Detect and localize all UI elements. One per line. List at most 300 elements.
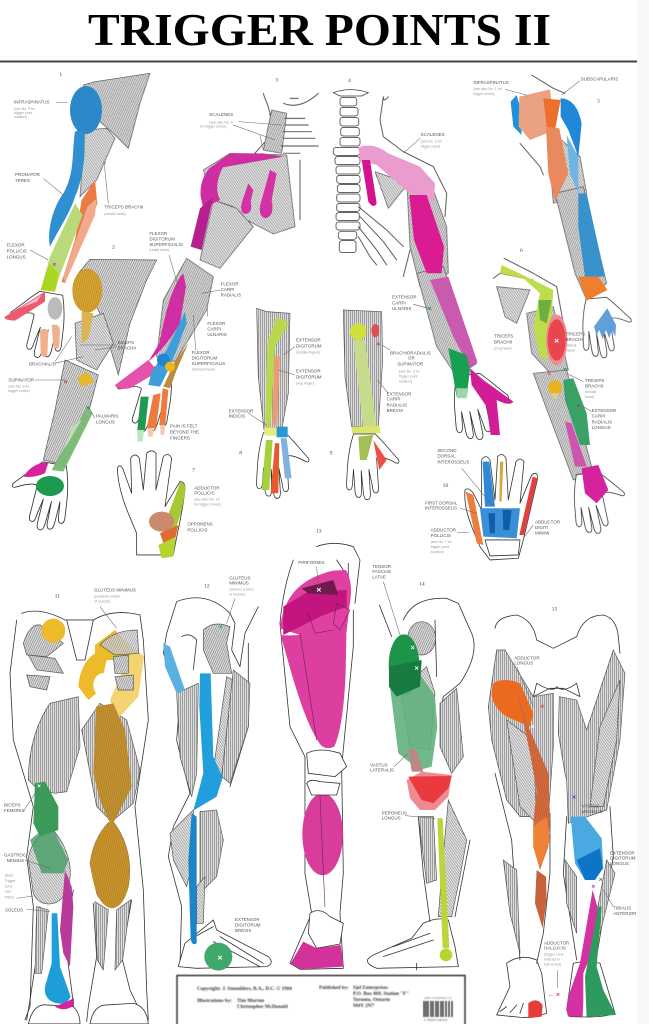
labels: LONGUS (514, 661, 533, 666)
labels: BREVIS (235, 928, 251, 933)
shoulder muscle fan (78, 259, 157, 375)
labels: 3 (275, 78, 278, 84)
green zone: wrist (158, 537, 176, 558)
labels: BRACHII (566, 337, 584, 342)
pink zone: thumb (5, 292, 45, 321)
figure 15: anterior legs (488, 606, 637, 1018)
trigger mark: supinator: × (64, 379, 68, 386)
blue zone: soleus (45, 913, 71, 1004)
figure 15: anterior legs: × (572, 792, 576, 801)
labels: SUPERFICIALIS (149, 242, 183, 247)
labels: (long head) (494, 346, 512, 350)
labels (494, 248, 617, 430)
trigger marks: × (531, 722, 535, 731)
salmon zone: shoulder (519, 89, 555, 140)
calf muscle, rear (170, 810, 193, 887)
blue zone: lower leg (188, 813, 197, 944)
right crossing muscle (590, 680, 620, 807)
trigger marks: × (415, 664, 419, 673)
labels (330, 345, 431, 457)
left thigh base (488, 650, 553, 817)
yellow-green strip (353, 340, 377, 427)
trigger mark: × (376, 341, 380, 348)
labels: TRICEPS (494, 334, 513, 339)
labels: SOLEUS (5, 907, 23, 912)
magenta zone: thumb base (23, 463, 48, 477)
figure 10: dorsal hand (425, 448, 561, 560)
magenta zone: hand (470, 368, 513, 435)
upper arm (407, 190, 448, 287)
labels: trigger point (14, 111, 32, 115)
labels: RADIALIS (592, 419, 612, 424)
labels: FEMORIS (4, 808, 24, 813)
blue hatching (578, 193, 605, 277)
forearm (343, 310, 383, 427)
labels: CARPI (387, 397, 400, 402)
deep hip muscles left (27, 655, 63, 690)
spine (333, 90, 368, 253)
icon: hand (109, 360, 178, 437)
wrist band (264, 428, 278, 436)
blue zone: hand (594, 308, 616, 339)
upper arm (75, 313, 113, 370)
calf muscle, front (418, 817, 437, 883)
barcode: ISBN 0-9790487-1-9 (424, 996, 452, 1000)
magenta zone: foot (291, 942, 344, 969)
green zone: lower leg and foot (585, 907, 616, 1017)
magenta zone: thigh (281, 620, 347, 748)
thigh muscles, rear (440, 688, 463, 773)
yellow zone: left gluteal (41, 619, 65, 643)
labels: head) (585, 395, 594, 399)
labels: RADIALIS (221, 293, 241, 298)
gluteal muscle (203, 624, 232, 673)
labels: (radial head) (149, 248, 169, 252)
labels: TRICEPS (566, 331, 585, 336)
figure 8: forearm extensors (229, 308, 322, 498)
labels: POLLICIS (194, 491, 215, 496)
labels: (see No. 9 for (8, 384, 30, 388)
trigger mark: extensor: × (576, 403, 580, 410)
labels: SCALENES (209, 112, 233, 117)
icon: hand (579, 295, 634, 359)
labels (7, 72, 143, 260)
labels: Trigger (5, 879, 16, 883)
labels: OPPONENS (187, 522, 213, 527)
labels: location) (431, 550, 444, 554)
labels: TERES (15, 178, 30, 183)
figure 7: hand with adductor pollicis (117, 451, 221, 558)
labels: SUPERFICIALIS (192, 361, 225, 366)
white bone patch (93, 673, 113, 697)
label: 13 (316, 529, 322, 535)
labels: INFRASPINATUS (14, 99, 50, 104)
labels: 14 (419, 582, 425, 588)
labels: for trigger zones) (194, 503, 221, 507)
blue zone: infraspinatus (70, 86, 102, 134)
scapula (497, 287, 530, 323)
labels: DIGITORUM (192, 355, 217, 360)
figure 13: whole leg, magenta zones: × (316, 585, 321, 595)
labels: 1 (59, 72, 62, 78)
credits box: P.O. Box 869, Station "F" (353, 991, 409, 997)
right thigh muscles (82, 703, 140, 822)
labels: POLLICIS (7, 249, 27, 254)
credits box (177, 976, 465, 1024)
credits box: Christopher McDonald (237, 1004, 288, 1010)
labels: ADDUCTOR (514, 656, 540, 661)
label: PIRIFORMIS (298, 560, 324, 565)
labels: TRICEPS BRACHII (104, 204, 143, 209)
labels: 5 (597, 98, 600, 104)
credits box: M4Y 2N7 (353, 1003, 374, 1009)
labels (204, 576, 261, 933)
labels: MINIMI (535, 530, 549, 535)
hip and leg outline (379, 598, 474, 713)
left shin (495, 773, 550, 1017)
labels: (posterior portion (94, 595, 120, 599)
thigh muscle, middle (213, 677, 233, 777)
shoulder and back fan (203, 153, 295, 234)
shoulder outline (493, 258, 563, 323)
green zone: wrist (448, 348, 470, 397)
magenta zone: tibialis and foot (567, 890, 597, 1017)
labels: ANTERIOR (613, 911, 637, 916)
labels: BICEPS (118, 340, 134, 345)
labels: DIGITORUM (235, 922, 261, 927)
labels: LONGUS (7, 255, 26, 260)
green zone: palm (36, 476, 64, 496)
blue zone: hip (163, 643, 185, 693)
labels: (Note: (5, 874, 14, 878)
trigger mark: tibialis: × (591, 883, 595, 890)
piriformis muscle (302, 580, 338, 595)
blue zone: arm (49, 128, 85, 247)
labels: ULNARIS (207, 332, 227, 337)
credits box: Copyright: J. Smoulders, B.A., D.C. © 1984 (197, 985, 292, 992)
ribs (358, 207, 403, 265)
back muscle fan (83, 73, 150, 148)
labels: BRACHIORADIALIS (390, 350, 431, 355)
labels: ADDUCTOR (194, 485, 220, 490)
figure 12: lateral leg (163, 576, 271, 971)
forearm (555, 187, 607, 300)
labels: TIBIALIS (613, 906, 631, 911)
green zone: forearm (563, 378, 590, 445)
labels: LONGUS (96, 420, 115, 425)
deep hip muscles right (113, 655, 133, 690)
blue zone: vastus medialis (571, 817, 603, 880)
neck muscles (263, 110, 287, 153)
gluteal muscles left (23, 625, 63, 657)
labels: LATERALIS (370, 767, 394, 772)
ochre zone: elbow (548, 380, 562, 395)
magenta zone: calf (302, 793, 343, 875)
neck outline (253, 93, 318, 155)
labels: 10 (443, 483, 448, 489)
upper arm (200, 200, 253, 268)
red zone: triceps (546, 315, 567, 365)
labels: BRACHII (494, 339, 512, 344)
calf muscle, rear (438, 800, 467, 917)
ochre hatching (72, 269, 102, 313)
blue zone: shoulder (561, 98, 582, 157)
figure 3: neck, shoulder and arm (109, 78, 318, 442)
labels: ← × (547, 992, 560, 999)
thigh muscle, front (222, 670, 250, 783)
labels: TRICEPS (585, 378, 604, 383)
upper arm (547, 127, 587, 203)
shin outline (418, 817, 470, 922)
right thigh base (558, 650, 625, 823)
labels: SUPINATOR (397, 361, 424, 366)
labels: INTEROSSEUS (425, 506, 457, 511)
forearm (257, 308, 290, 430)
orange zone: thumb (466, 492, 483, 545)
magenta zone: lower leg (60, 870, 73, 967)
red zone: finger (519, 477, 537, 535)
vastus lateralis muscle (408, 748, 423, 772)
labels: LONGUS (592, 425, 611, 430)
red zone: hand (373, 440, 387, 470)
green zone: thigh, light (390, 673, 437, 770)
orange zone: fingers (40, 325, 60, 357)
scapula (375, 172, 408, 208)
title: TRIGGER POINTS II (88, 4, 551, 55)
blue zone: thigh (193, 673, 223, 811)
icon: hand (449, 370, 514, 443)
figure 6: shoulder and arm, posterior (493, 248, 629, 536)
upper arm (527, 307, 568, 377)
labels: MEDIALIS (582, 809, 603, 814)
labels: DORSAL (437, 454, 456, 459)
pink zone: trapezius (358, 145, 435, 202)
labels: PALMARIS (96, 414, 118, 419)
magenta zone: deltoid and shoulder (200, 153, 283, 208)
labels: (see No. 2 for (399, 370, 421, 374)
labels: location) (399, 380, 412, 384)
labels: DIGITI (535, 525, 548, 530)
thigh muscles (400, 667, 435, 750)
pelvis and leg outlines (10, 611, 148, 1020)
labels: ADDUCTOR (431, 528, 457, 533)
green zone: foot (204, 943, 232, 971)
labels: LONGUS (382, 816, 401, 821)
credits box: Toronto, Ontario (353, 997, 391, 1003)
labels: GLUTEUS MINIMUS (94, 588, 136, 593)
labels: (see No. 7 for (431, 540, 453, 544)
green zone: forearm (52, 407, 93, 472)
labels: extends to (544, 958, 560, 962)
labels: EXTENSOR (392, 295, 417, 300)
blue hatching (70, 86, 102, 134)
magenta zone: forearm and wrist (565, 422, 587, 467)
labels: ULNARIS (392, 306, 411, 311)
lower leg right (87, 900, 145, 1022)
labels: 15 (552, 606, 557, 612)
labels: INTEROSSEUS (437, 459, 469, 464)
labels: VASTUS (370, 762, 388, 767)
labels (187, 467, 221, 532)
blue zone (277, 427, 288, 437)
ochre zone: hamstring (93, 703, 132, 823)
labels: FINGERS (170, 435, 190, 440)
cervical vertebrae (282, 118, 318, 220)
labels: (trigger zone (544, 952, 564, 956)
left thigh muscles (28, 697, 80, 793)
labels: (lateral (566, 343, 577, 347)
labels: ABDUCTOR (535, 520, 561, 525)
upper arm (80, 128, 115, 197)
orange zone: forearm (62, 180, 97, 283)
right shin muscles (565, 860, 615, 940)
labels: FLEXOR (192, 350, 210, 355)
labels: 4 (348, 78, 351, 84)
labels: 8 (239, 451, 242, 457)
forearm (533, 370, 593, 480)
icon: hand (6, 457, 74, 534)
icon: hand (346, 434, 399, 500)
orange hatching (517, 690, 550, 823)
salmon zone (273, 357, 280, 425)
labels: PAIN IS FELT (170, 423, 198, 428)
trigger mark: × (219, 624, 223, 631)
labels: trigger zones) (8, 389, 30, 393)
ochre zone: wrist (163, 343, 188, 388)
figure 11: posterior legs: × (37, 784, 41, 790)
orange zone: finger (271, 443, 279, 493)
icon: hand (569, 468, 629, 536)
labels: DIGITORUM (296, 343, 322, 348)
labels: SUBSCAPULARIS (581, 76, 618, 81)
orange zone: shoulder (543, 98, 561, 130)
labels: BRACHIALIS (29, 362, 56, 367)
labels: NEMIUS (7, 858, 24, 863)
labels: CARPI (392, 300, 406, 305)
credits box: Illustrations by: (197, 998, 232, 1004)
labels: BRACHII (118, 345, 136, 350)
left inner thigh (507, 720, 537, 823)
shoulder outline (520, 75, 565, 175)
labels: DIGITORUM (610, 856, 636, 861)
labels: ADDUCTOR (544, 940, 570, 945)
labels: 12 (204, 583, 210, 589)
leg outline (280, 560, 353, 969)
labels: TENSOR (372, 564, 392, 569)
yellow zone: muscle belly (350, 323, 367, 340)
labels (473, 76, 618, 104)
knee bones (307, 750, 347, 777)
trigger marks (411, 643, 419, 673)
blue zone: scapular edge (511, 95, 522, 135)
trigger mark: extensor: × (599, 876, 603, 883)
forearm (417, 267, 477, 377)
ankle bones (308, 911, 343, 948)
lower leg muscle left (35, 907, 48, 973)
green zone: hand (358, 435, 373, 460)
hand outline (117, 451, 185, 555)
credits box: Sjef Enterprises (353, 985, 388, 991)
labels (8, 244, 136, 425)
gluteal muscle (408, 622, 436, 655)
green zone: upper thigh, dark (389, 634, 419, 696)
icon: hand (256, 433, 309, 498)
labels: FLEXOR (7, 243, 25, 248)
wrist bones (485, 540, 520, 556)
labels: GLUTEUS (229, 576, 250, 581)
tibia head (307, 780, 340, 795)
trigger mark: × (52, 262, 56, 269)
heel bones (28, 1005, 80, 1024)
labels: (anterior portion (229, 588, 254, 592)
labels: POLLICIS (431, 533, 451, 538)
thigh muscle, rear (177, 683, 198, 797)
labels: (humeral head) (192, 368, 215, 372)
labels: VASTUS (582, 804, 599, 809)
labels: EXTENSOR (229, 408, 254, 413)
labels: BRACHII (585, 384, 603, 389)
blue zone: forearm (148, 312, 187, 387)
ochre zone: elbow (77, 372, 95, 387)
labels: BREVIS (387, 408, 403, 413)
lower leg muscles right (95, 900, 131, 970)
labels: PRONATOR (15, 172, 41, 177)
trigger mark: × (547, 370, 551, 377)
labels: (see also No. 10 (194, 498, 220, 502)
labels: for trigger zones) (200, 125, 226, 129)
labels: EXTENSOR (610, 850, 635, 855)
icon: hand (3, 287, 70, 361)
labels: PERONEUS (382, 810, 407, 815)
labels: trigger point (399, 375, 417, 379)
labels: (see No. 5 for (14, 107, 36, 111)
labels: (see also No. 4 (209, 120, 233, 124)
ochre zone: shoulder (72, 269, 102, 313)
labels: 7 (192, 467, 195, 473)
figure 6: shoulder and arm, posterior: × (554, 336, 559, 346)
labels: of muscle) (94, 600, 110, 604)
labels: SECOND (437, 448, 457, 453)
labels: of muscle) (229, 593, 245, 597)
yellow-green zone: forearm (41, 203, 83, 292)
figure 9: forearm, extensor view (330, 310, 431, 500)
red zone: forearm (371, 324, 379, 337)
labels: SCALENES (421, 132, 445, 137)
labels: RADIALIS (387, 402, 407, 407)
labels: OR (408, 355, 415, 360)
green zone: overlap (389, 660, 422, 697)
shin muscle (200, 810, 223, 893)
green zone: thumb (166, 483, 185, 533)
labels: CARPI (592, 414, 605, 419)
labels: FLEXOR (207, 321, 226, 326)
hand outline (465, 454, 537, 560)
gluteal muscles right (100, 630, 139, 655)
barcode: 9 780970 048719 (424, 1018, 448, 1022)
forearm (157, 258, 213, 362)
figure 13: whole leg, magenta zones (280, 529, 360, 969)
labels: (medial (585, 390, 597, 394)
magenta zone: forearm and thumb (148, 273, 186, 362)
labels (4, 588, 136, 912)
sacrum (67, 620, 93, 660)
labels: location) (14, 115, 27, 119)
labels: PSIS) (5, 895, 14, 899)
labels: FLEXOR (221, 282, 239, 287)
yellow-green zone (265, 317, 289, 427)
arm outline (380, 97, 447, 277)
labels (370, 564, 435, 821)
